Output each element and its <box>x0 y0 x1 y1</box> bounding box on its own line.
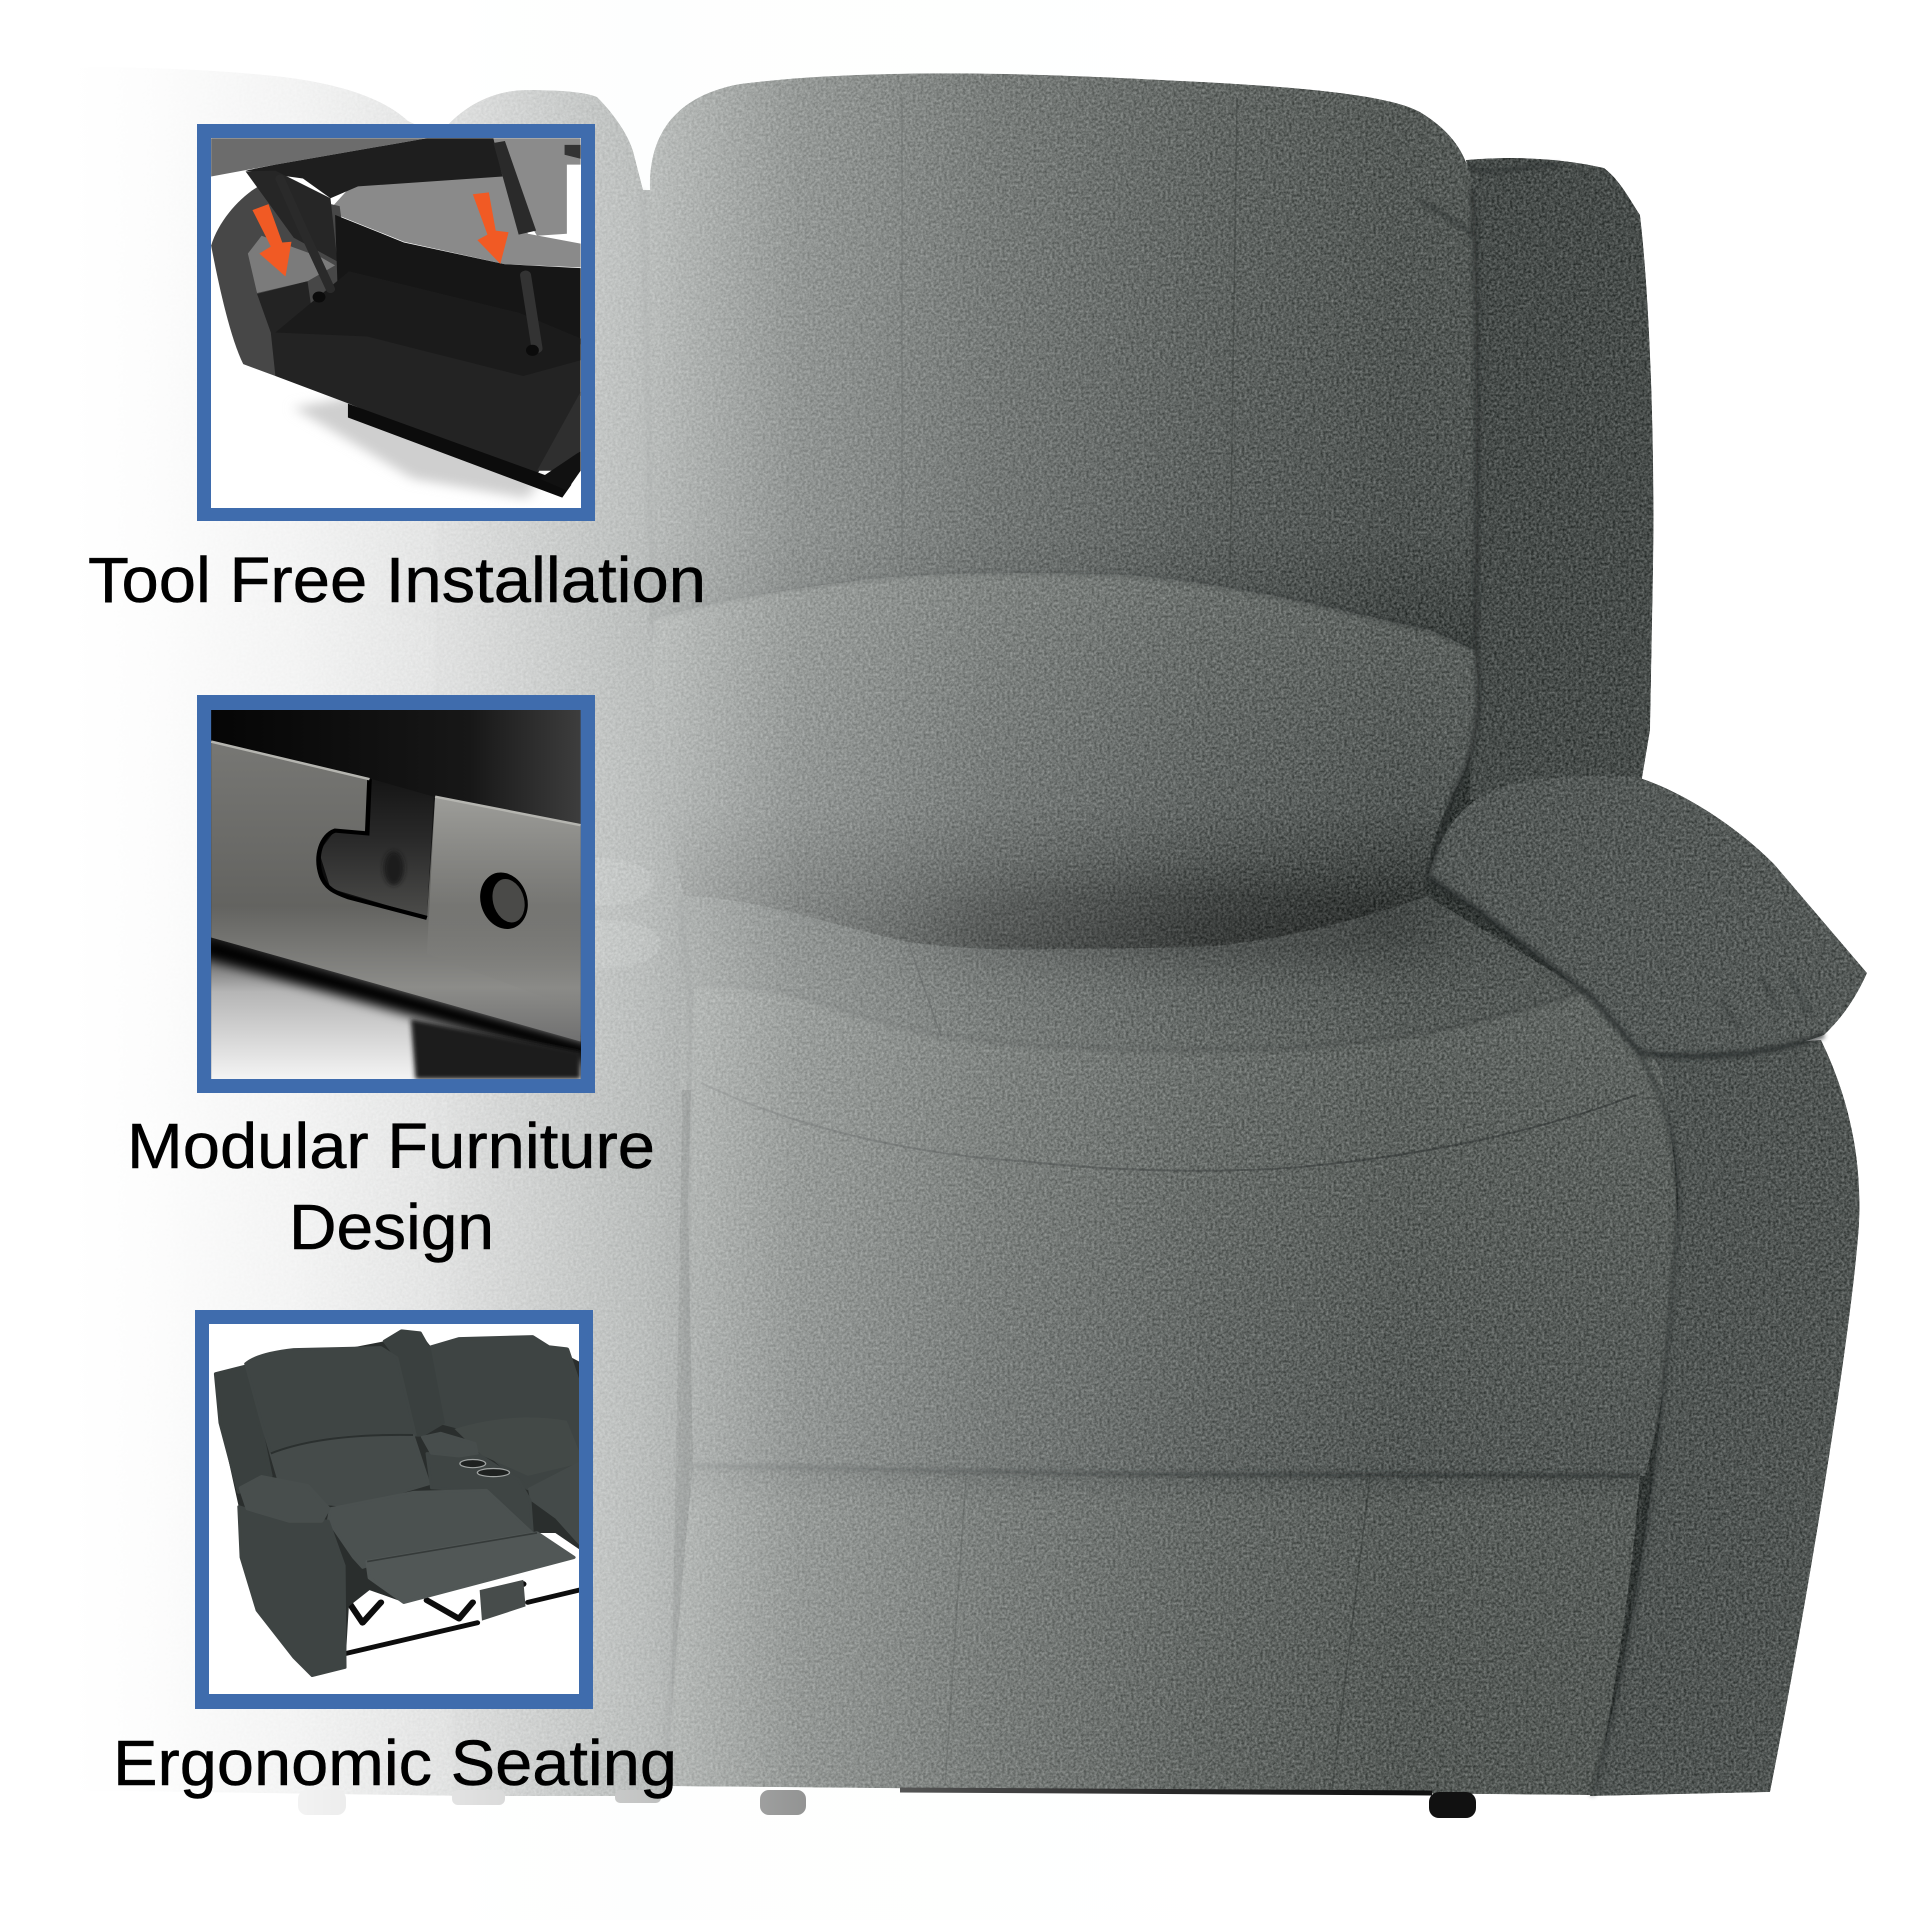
main chair: seat cushion <box>688 986 1677 1476</box>
ghost: left recliner <box>60 67 470 1796</box>
photo: under-seat attachment <box>211 138 581 508</box>
main chair: armrest <box>1428 776 1867 1053</box>
round hole <box>474 868 534 933</box>
ghost: cup holders <box>546 858 661 968</box>
lower blurred floor <box>211 933 581 1079</box>
orange arrows <box>252 192 509 276</box>
label: ergonomic seating: Ergonomic Seating <box>113 1727 677 1799</box>
main chair: lumbar cushion <box>653 573 1478 949</box>
lumbar cushion <box>271 1435 429 1506</box>
right upright <box>493 138 581 236</box>
black dust cover <box>257 271 581 475</box>
seat cushion behind <box>333 175 581 267</box>
plate edges <box>319 779 427 918</box>
lumbar deep shadow <box>910 901 1450 949</box>
label: tool free installation: Tool Free Installation <box>88 544 706 616</box>
panel: tool free installation <box>197 124 595 521</box>
back cloth band <box>335 215 581 344</box>
footrest <box>367 1533 574 1602</box>
feet <box>298 1790 1476 1818</box>
console arm <box>422 1433 477 1456</box>
frame <box>197 695 595 1093</box>
main chair: outer side panel <box>1590 1040 1859 1796</box>
left side of chair <box>211 187 349 376</box>
console body <box>427 1453 532 1533</box>
photo: keyhole slot detail <box>202 710 592 1079</box>
hinge brackets <box>304 244 542 353</box>
armrest <box>241 1477 328 1521</box>
upper seat fabric <box>211 138 427 177</box>
mechanism <box>347 1584 579 1653</box>
label: modular furniture design: Design <box>289 1191 494 1263</box>
left wing <box>216 1366 271 1492</box>
black under-band <box>246 138 503 198</box>
main chair: seat deck <box>680 892 1640 1090</box>
console lower box <box>480 1580 526 1621</box>
light side panel <box>248 236 335 293</box>
cup holders <box>460 1460 509 1477</box>
back cushion <box>246 1347 415 1453</box>
label: modular furniture design: Modular Furniture <box>127 1110 655 1182</box>
side panel <box>239 1506 345 1676</box>
frame <box>197 124 595 521</box>
frame <box>195 1310 593 1709</box>
silhouette backing <box>216 1331 579 1676</box>
dark block <box>411 1019 581 1079</box>
dark background <box>211 710 581 1079</box>
steel plate <box>211 742 581 1041</box>
seat <box>328 1490 532 1568</box>
main chair: footrest <box>667 1465 1640 1795</box>
panel: modular furniture design <box>197 695 595 1093</box>
second seat <box>528 1462 579 1545</box>
dark shadow along plate edge <box>202 946 592 1054</box>
white fade overlay <box>0 0 1400 1920</box>
panel: ergonomic seating <box>195 1310 593 1709</box>
slot interior <box>319 779 434 917</box>
main chair: headrest cushion <box>649 73 1477 650</box>
console wing <box>385 1331 443 1435</box>
ghost: centre console <box>436 90 720 1796</box>
label: modular furniture design <box>127 1110 655 1263</box>
photo: reclined loveseat <box>209 1324 579 1694</box>
main chair: underside shadow line <box>900 1790 1432 1793</box>
strap <box>246 171 337 261</box>
main chair: wing <box>1466 158 1653 800</box>
floor shadow <box>294 396 542 498</box>
main chair: dark backing <box>660 170 1705 1792</box>
mechanism rail <box>348 404 571 498</box>
second seat back <box>431 1337 579 1488</box>
